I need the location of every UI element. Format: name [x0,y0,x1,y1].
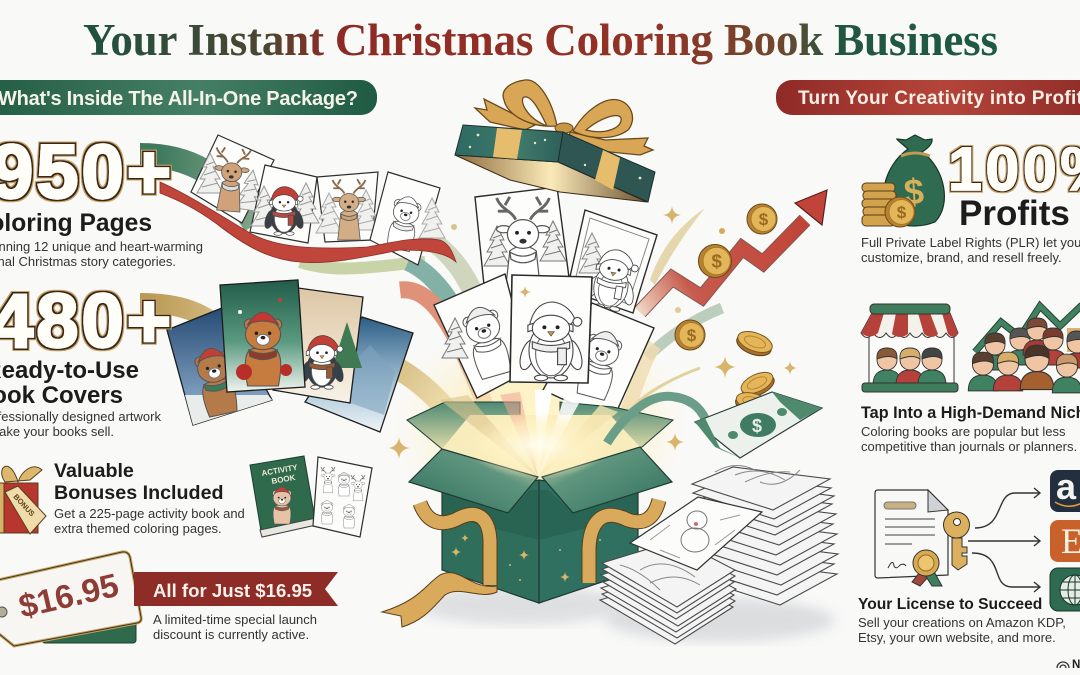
arrows to sales channels [968,488,1040,592]
stack: right [692,465,838,605]
icon: crowd with rising trend [968,305,1080,393]
red ribbon [160,182,456,263]
ribbon swooshes behind left column [140,155,505,455]
icon: activity book [250,456,316,537]
description: license: Sell your creations on Amazon KDP, [858,615,1066,630]
icon: money bag and coins: $ [903,171,925,213]
loose page [630,497,762,570]
card: penguin [250,165,319,243]
heading: valuable bonuses: Bonuses Included [54,482,224,504]
header pill: turn your creativity into profit: Turn Your Creativity into Profit [798,88,1080,109]
description: price [153,612,317,642]
cover: snow scene [305,317,413,432]
heading: profits: Profits [959,194,1070,233]
sheet: extra coloring page [313,457,372,537]
title: Your Instant Christmas Coloring Book Business [83,15,998,65]
description: license: Etsy, your own website, and more. [858,630,1056,645]
lid sides [455,125,563,162]
cover: otter [220,280,305,392]
icon: activity book: BOOK [271,473,296,486]
paper stacks shadow [605,598,835,642]
description: book covers [0,409,161,439]
description: coloring pages [0,239,203,269]
gift box [382,390,673,627]
box ribbons [420,500,659,585]
page: penguin right [567,210,657,314]
icon: license document, seal and key [875,490,970,586]
page: bear left [434,274,530,398]
box faces [442,480,539,603]
description: niche [861,424,1077,454]
box back flaps [407,402,520,450]
description: profits: Full Private Label Rights (PLR) let you [861,235,1080,250]
cards: coloring pages strip [191,135,445,265]
box shadow [415,585,625,625]
description: bonuses: extra themed coloring pages. [54,521,222,536]
icon: storefront [861,304,958,392]
icon: etsy [1050,520,1080,562]
stack: left [600,540,736,644]
icon: amazon: a [1056,466,1077,507]
burst glow and light rays [390,208,722,535]
heading: license: Your License to Succeed [858,596,1042,613]
cover: penguin [273,288,363,403]
dollar bill [695,392,822,458]
card: reindeer [191,135,274,223]
dollar bill: $ [752,416,762,436]
coins [675,204,778,418]
description: bonuses: Get a 225-page activity book and [54,506,245,521]
header pill: what's inside [0,80,377,115]
card: fawn [316,172,379,242]
price banner: All for Just $16.95 [153,580,312,601]
description: profits [861,235,1080,265]
card: polar bear [370,172,445,265]
glow [468,411,608,479]
gift lid with bow [455,80,655,202]
icon: website globe [1050,568,1080,611]
box sparkles [451,534,601,582]
description: niche: competitive than journals or planners. [861,439,1077,454]
price tag [0,552,141,646]
price banner [134,572,338,606]
page: penguin center [510,275,592,383]
light rays [440,390,618,477]
description: price: A limited-time special launch [153,612,317,627]
bow tails [475,99,535,130]
icon: money bag and coins [862,135,944,227]
bow left loop [503,80,557,126]
growth arrow [640,190,827,312]
description: bonuses [54,506,245,536]
icon: bonus gift: BONUS [12,492,37,518]
description: profits: customize, brand, and resell freely. [861,250,1062,265]
page: reindeer [475,187,570,295]
book covers [167,280,413,432]
box interior [442,415,640,477]
heading: valuable bonuses [54,460,224,504]
watermark [1057,659,1080,671]
bow right loop [573,100,633,138]
icon: bonus gift [0,466,46,534]
heading: ready-to-use book covers [0,357,139,409]
heading: valuable bonuses: Valuable [54,460,134,482]
description: license [858,615,1066,645]
sparkles [388,206,797,459]
flap shadows [442,490,539,540]
page: bear right [543,303,654,422]
description: price: discount is currently active. [153,627,309,642]
box front flaps [409,449,538,513]
center coloring pages [434,187,657,422]
header pill: turn your creativity into profit [776,80,1080,115]
icon: activity book: ACTIVITY [261,463,299,478]
cover: bear [167,308,272,425]
ribbon to money [607,396,708,443]
header pill: what's inside: What's Inside The All-In-One Package? [0,88,358,110]
description: niche: Coloring books are popular but less [861,424,1066,439]
icon: amazon [1050,466,1080,512]
price tag: $16.95 [15,566,122,625]
lid underside [455,155,647,202]
ribbon tail [382,573,497,627]
